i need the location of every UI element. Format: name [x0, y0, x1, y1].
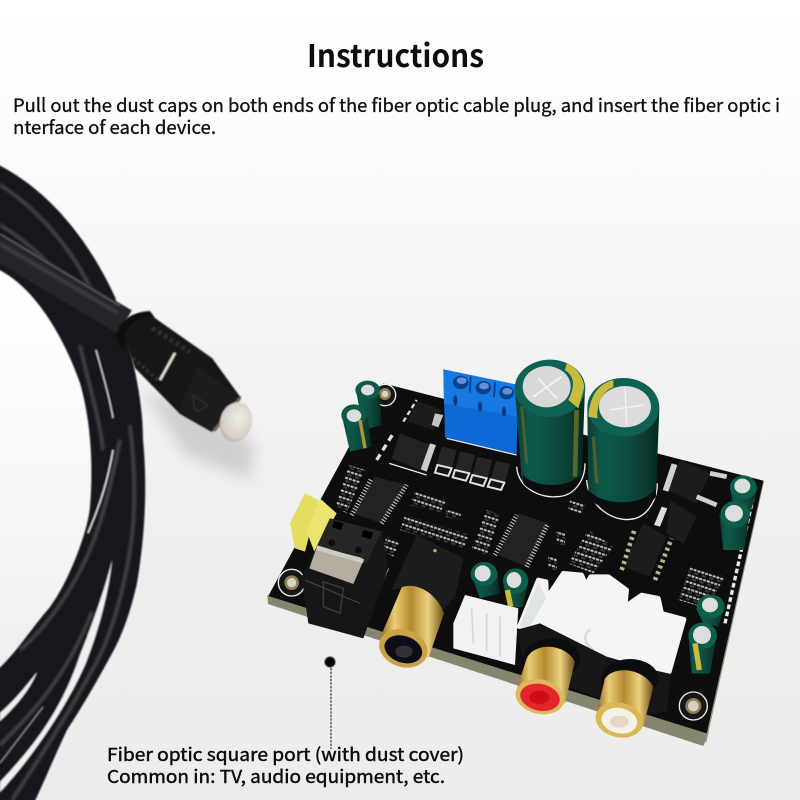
regulators	[377, 400, 727, 543]
black RCA socket base	[517, 623, 671, 715]
mounting holes	[278, 384, 707, 720]
right large capacitor	[587, 378, 659, 520]
instruction text: nterface of each device.	[13, 114, 216, 140]
fiber optic cable coil	[0, 163, 145, 800]
dust cover	[309, 545, 364, 584]
black coaxial socket body	[392, 535, 463, 613]
shadow of plug	[142, 390, 255, 480]
plug body	[124, 316, 241, 431]
small mid capacitors	[471, 562, 528, 608]
callout text	[107, 741, 464, 789]
instruction text: Pull out the dust caps on both ends of the fiber optic cable plug, and insert the fiber optic i	[13, 92, 780, 118]
red RCA connector	[512, 638, 580, 719]
plug collar	[116, 311, 155, 350]
board	[268, 383, 763, 733]
coaxial gold connector	[374, 586, 444, 674]
callout text: Common in: TV, audio equipment, etc.	[107, 763, 445, 789]
white pin header	[453, 595, 518, 665]
white RCA housing	[519, 573, 684, 672]
pointer dot	[324, 656, 336, 668]
title: Instructions	[307, 31, 484, 76]
white area inside cable coil	[0, 270, 91, 670]
instruction text	[13, 92, 780, 140]
plug-side cable	[0, 245, 125, 322]
right edge capacitors	[688, 475, 758, 673]
white RCA connector	[592, 659, 658, 742]
coil silhouette	[0, 163, 145, 800]
circuit board	[267, 360, 764, 746]
transistor row	[435, 447, 510, 490]
top-left capacitors	[341, 381, 382, 452]
plug square tip	[178, 366, 241, 432]
strand highlights	[0, 185, 134, 800]
yellow film capacitors	[290, 493, 337, 553]
left large capacitor	[515, 360, 585, 497]
resistor clusters	[335, 465, 725, 608]
optical square port	[302, 518, 388, 638]
traces and white marks	[363, 438, 753, 627]
plug slit	[160, 353, 175, 380]
strand gaps	[0, 672, 37, 721]
plug lens	[215, 399, 257, 445]
fiber optic plug	[116, 311, 257, 445]
pointer dashed line	[330, 668, 332, 749]
callout pointer	[324, 656, 336, 749]
blue terminal block	[443, 369, 518, 454]
board edge	[267, 595, 709, 746]
main chips	[352, 477, 672, 580]
callout text: Fiber optic square port (with dust cover)	[107, 741, 464, 767]
